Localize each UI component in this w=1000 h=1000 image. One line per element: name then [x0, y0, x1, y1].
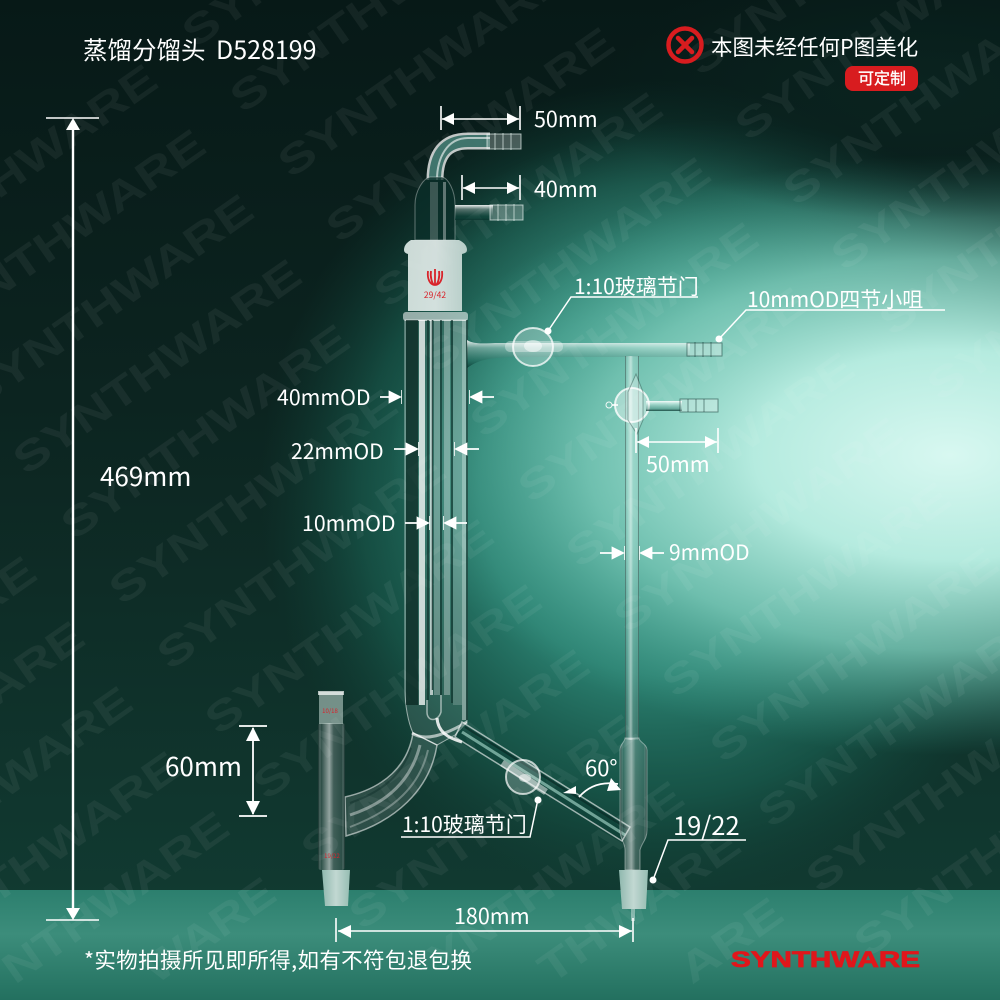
dimension: 9mmOD [600, 537, 750, 567]
callout: upper 1:10 glass stopcock [544, 271, 699, 334]
notice text: 本图未经任何P图美化 [711, 31, 918, 62]
dimension: 50mm side hose: 50mm [646, 448, 710, 479]
watermarks: YNTHWARE [419, 772, 692, 982]
frosted ground joint with logo: 29/42 [424, 289, 446, 301]
dimension: 10mmOD [302, 507, 467, 538]
dimension: 40mmOD: 40mmOD [277, 381, 371, 412]
U-bend to left receiver [345, 733, 437, 836]
watermarks: SYNTHWARE [509, 278, 815, 511]
watermarks: SYNTHWARE [701, 538, 1000, 771]
watermarks: ARE [670, 888, 791, 992]
watermarks: SYNTHWARE [340, 705, 646, 938]
callout: 10mmOD four-barb hose: 10mmOD四节小咀 [747, 284, 923, 314]
callout: upper 1:10 glass stopcock: 1:10玻璃节门 [574, 271, 699, 301]
customizable badge: 可定制 [858, 65, 906, 89]
dimension: 40mmOD [277, 381, 494, 412]
watermarks: SYNTHWARE [52, 315, 358, 548]
dimension: 60mm [165, 726, 267, 816]
glassware [318, 133, 722, 921]
watermarks: SYNTHWARE [605, 408, 911, 641]
left receiver tube: 10/18 [322, 706, 338, 715]
watermarks: SYNTHWARE [365, 83, 671, 316]
title: D528199 [216, 31, 316, 67]
left receiver tube [318, 691, 350, 906]
dimension: 9mmOD: 9mmOD [669, 537, 750, 567]
label: 40mm: 40mm [534, 173, 598, 204]
label: 50mm: 50mm [534, 103, 598, 134]
watermarks: WARE [134, 868, 284, 992]
callout: lower 1:10 glass stopcock: 1:10玻璃节门 [402, 809, 527, 839]
watermarks: SYNTHWARE [148, 445, 454, 678]
dimension: 40mm arm [462, 175, 520, 200]
watermarks: SYNTHWARE [749, 603, 1000, 836]
brand logo: SYNTHWARE [731, 947, 920, 972]
small stopcock with side hose [606, 374, 718, 434]
dimension: 50mm hose [441, 106, 520, 130]
footnote: *实物拍摄所见即所得,如有不符包退包换 [84, 944, 472, 975]
customizable badge [845, 65, 918, 91]
watermarks: SYNTHWARE [292, 640, 598, 873]
dimension: 10mmOD: 10mmOD [302, 507, 396, 538]
upper adapter body and side arm [415, 177, 523, 240]
left receiver tube: 19/22 [324, 851, 340, 860]
callout: 10mmOD four-barb hose [716, 284, 945, 342]
callout: 19/22 joint: 19/22 [673, 806, 740, 843]
dimension: 22mmOD: 22mmOD [291, 436, 384, 466]
dimension: 22mmOD [291, 436, 479, 466]
title: 蒸馏分馏头 [83, 32, 206, 67]
icon: no retouching mark [668, 28, 702, 62]
watermarks: SYNTHWARE [4, 250, 310, 483]
watermarks: SYNTHWARE [413, 148, 719, 381]
watermarks: SYNTHWARE [317, 18, 623, 251]
callout: 19/22 joint [650, 806, 746, 884]
label: 469mm: 469mm [100, 457, 191, 494]
frosted ground joint with logo [404, 240, 467, 311]
dimension: 50mm side hose [636, 428, 718, 479]
diagonal arm [455, 722, 630, 841]
watermarks: SYNTHWARE [196, 510, 502, 743]
upper stopcock [505, 328, 563, 366]
watermarks: SYNTHWARE [557, 343, 863, 576]
callout: lower 1:10 glass stopcock [401, 796, 542, 839]
dimension: total height 469mm [46, 118, 99, 920]
angle annotation: 60 degrees [563, 751, 621, 797]
dimension: 180mm: 180mm [454, 900, 530, 931]
top bent hose connector [435, 133, 521, 180]
watermarks: SYNTHWARE [461, 213, 767, 446]
dimension: 60mm: 60mm [165, 747, 242, 784]
upper horizontal side arm [467, 340, 722, 368]
watermarks: SYNTHWARE [100, 380, 406, 613]
lower stopcock [502, 760, 546, 794]
dimension: 180mm [336, 900, 633, 942]
watermarks: THWARE [529, 819, 749, 992]
main jacket [403, 312, 468, 745]
angle annotation: 60 degrees: 60° [585, 751, 618, 783]
watermarks: SYNTHWARE [244, 575, 550, 808]
right vertical tube [619, 356, 648, 921]
watermarks: SYNTHWARE [653, 473, 959, 706]
